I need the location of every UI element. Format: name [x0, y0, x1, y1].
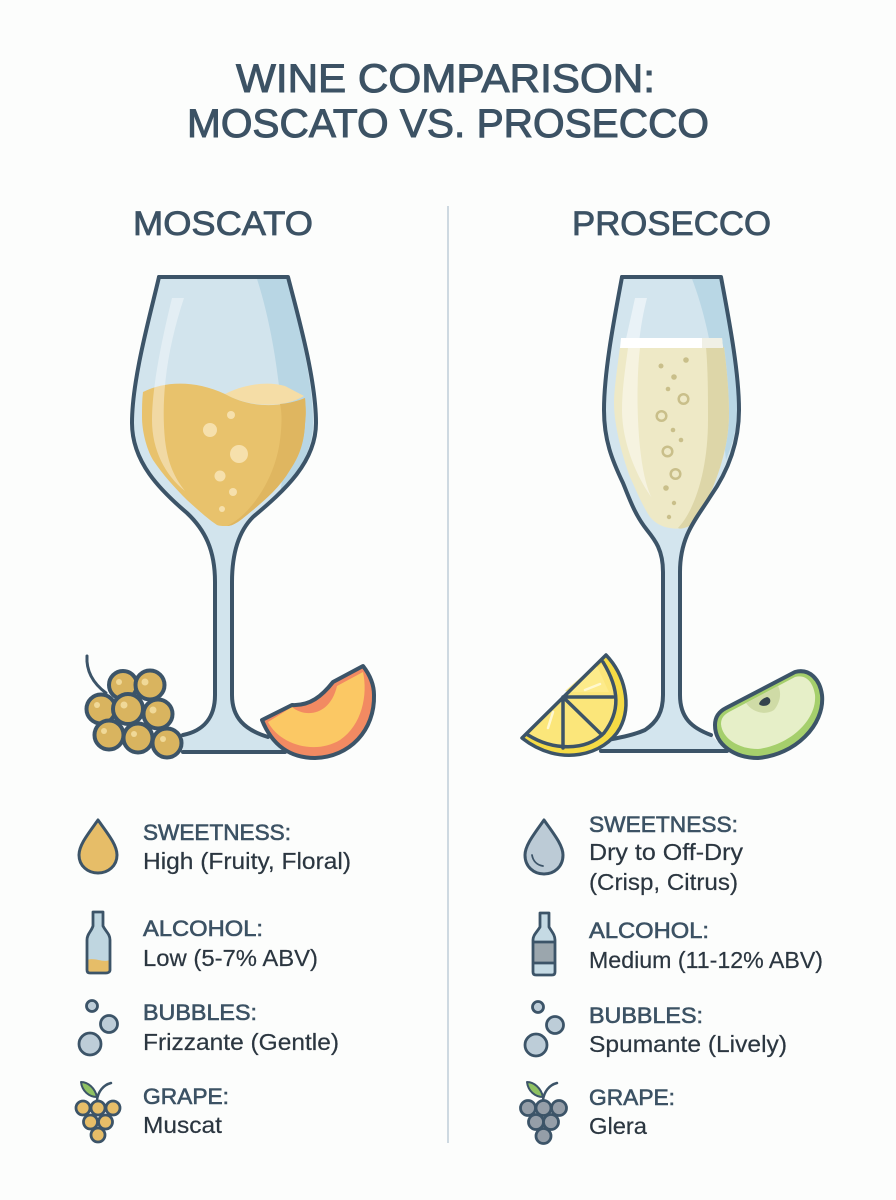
- icon: grape: [520, 1082, 566, 1144]
- icon: sweetness drop: [525, 820, 563, 874]
- illustration: Moscato wine glass: [132, 277, 316, 752]
- icon: alcohol bottle: [87, 912, 110, 973]
- text: grape: Muscat: [143, 1112, 223, 1138]
- text: alcohol: Low (5-7% ABV): [143, 945, 318, 971]
- title: [187, 57, 709, 146]
- wine back wave: [225, 384, 304, 405]
- text: alcohol: ALCOHOL:: [143, 916, 263, 941]
- illustration: lemon wedge: [522, 655, 626, 755]
- text: sweetness: Dry to Off-Dry: [589, 839, 744, 865]
- icon: bubbles: [525, 1002, 564, 1056]
- text: bubbles: Frizzante (Gentle): [143, 1029, 339, 1055]
- icon: grape: [76, 1082, 120, 1142]
- panel: Prosecco attributes: [520, 812, 823, 1144]
- icon: sweetness drop: [79, 820, 117, 873]
- text: bubbles: BUBBLES:: [589, 1003, 703, 1028]
- text: grape: [143, 1084, 229, 1138]
- text: grape: GRAPE:: [589, 1085, 675, 1110]
- sparkling wine: [614, 347, 729, 529]
- text: bubbles: BUBBLES:: [143, 1000, 257, 1025]
- heading: Moscato: MOSCATO: [133, 205, 313, 243]
- text: grape: Glera: [589, 1113, 647, 1139]
- title: MOSCATO VS. PROSECCO: [187, 102, 709, 146]
- text: sweetness: High (Fruity, Floral): [143, 848, 351, 874]
- illustration: Muscat grapes: [86, 656, 182, 758]
- text: grape: [589, 1085, 675, 1139]
- text: grape: GRAPE:: [143, 1084, 229, 1109]
- panel: Moscato attributes: [76, 820, 351, 1142]
- text: sweetness: SWEETNESS:: [143, 820, 291, 845]
- wine body: [142, 384, 306, 526]
- icon: bubbles: [79, 1000, 118, 1055]
- text: sweetness: SWEETNESS:: [589, 812, 738, 837]
- text: alcohol: Medium (11-12% ABV): [589, 947, 823, 973]
- text: alcohol: [589, 918, 823, 973]
- glass highlight: [624, 298, 647, 348]
- text: alcohol: ALCOHOL:: [589, 918, 709, 943]
- text: sweetness: [589, 812, 744, 895]
- text: sweetness: (Crisp, Citrus): [589, 869, 738, 895]
- text: bubbles: [143, 1000, 339, 1055]
- text: bubbles: Spumante (Lively): [589, 1031, 787, 1057]
- glass highlight: [152, 298, 185, 491]
- text: sweetness: [143, 820, 351, 874]
- title: WINE COMPARISON:: [236, 57, 655, 101]
- illustration: peach slice: [262, 666, 374, 758]
- heading: Prosecco: PROSECCO: [572, 205, 771, 243]
- icon: alcohol bottle: [533, 913, 555, 975]
- foam: [620, 338, 723, 348]
- illustration: green apple slice: [715, 671, 822, 758]
- text: alcohol: [143, 916, 318, 971]
- illustration: Prosecco flute: [601, 277, 739, 751]
- text: bubbles: [589, 1003, 787, 1057]
